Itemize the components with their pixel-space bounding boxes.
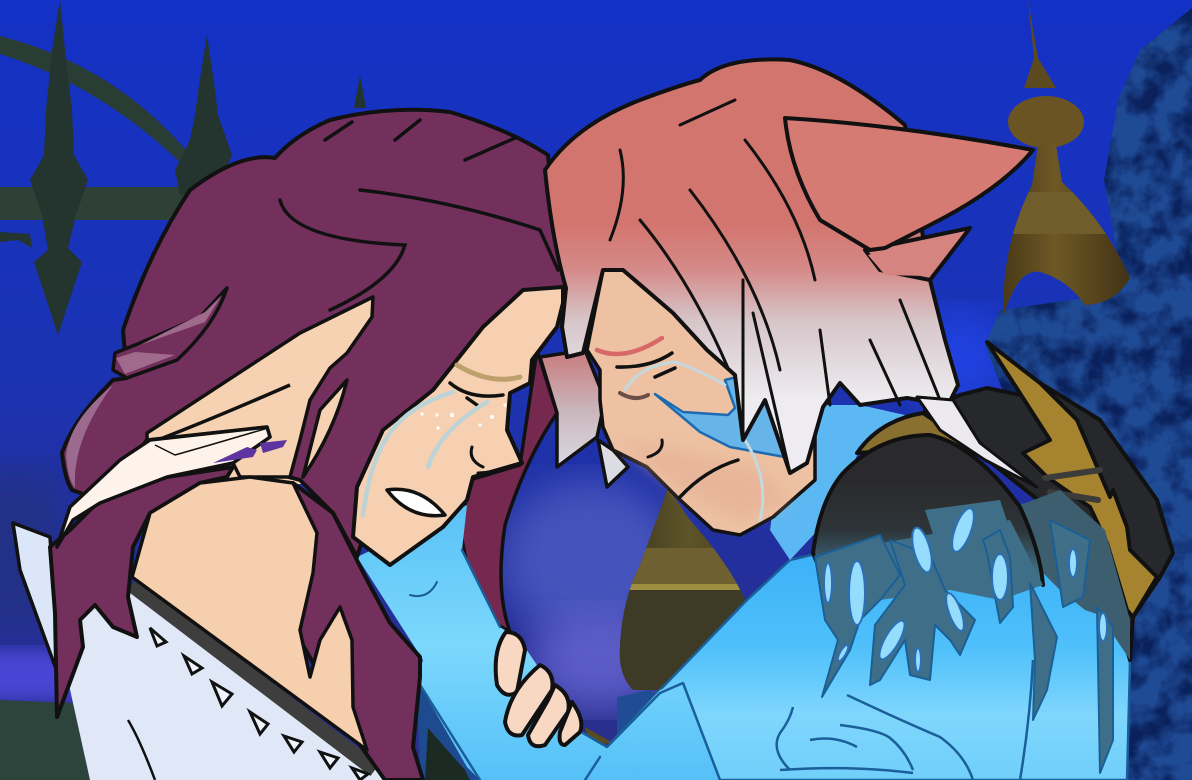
- figure: skin behind the feather: [205, 462, 303, 484]
- scenery: blue rock pillar: [985, 8, 1192, 780]
- figure: white braid: [917, 397, 1037, 487]
- tears: [363, 392, 487, 515]
- figure: fold lines on the torso: [777, 660, 1033, 780]
- closed eye: [450, 383, 503, 405]
- scenery: dark spires and rail left: [0, 0, 366, 335]
- scenery: rock and stone behind the arm: [417, 680, 660, 780]
- figure: woman's hair strand lines: [280, 120, 558, 310]
- figure: man's face: [587, 270, 815, 535]
- figure: man's coat shoulder: [813, 342, 1173, 660]
- figure: man's neck: [770, 405, 905, 560]
- brow: [457, 365, 520, 379]
- figure: elf ear skin: [147, 297, 373, 477]
- figure: woman's bare shoulder: [132, 477, 367, 750]
- figure: dress lace trim: [132, 585, 375, 780]
- clenched mouth: [387, 489, 445, 516]
- cat ear: [785, 118, 1033, 250]
- figure: hair ribbon lock: [113, 288, 227, 378]
- hair strand lines: [610, 100, 940, 473]
- gold ornament: [987, 342, 1157, 617]
- scenery: stone at lower left: [0, 700, 90, 780]
- nostril shadow: [620, 393, 648, 398]
- teal fade of the coat: [1020, 490, 1130, 660]
- figure: white feather ornament: [57, 427, 287, 547]
- figure: woman's lock over shoulder: [293, 483, 423, 780]
- figure: woman's lower left strands: [50, 467, 233, 717]
- figure: woman's back hair between the faces: [460, 350, 557, 632]
- figure: man's lower fringe behind the face: [540, 350, 628, 487]
- dome of the shoulder: [813, 435, 1043, 585]
- freckles: [420, 403, 507, 430]
- second ear tip: [865, 228, 970, 280]
- figure: woman's dress: [13, 523, 385, 780]
- figure: woman's face: [353, 287, 563, 565]
- scenery: bronze bell spire right: [1000, 0, 1135, 320]
- brow: [597, 338, 662, 354]
- figure: blue arm: [357, 505, 720, 780]
- figure: light holes in the tendrils: [824, 506, 1107, 672]
- figure: woman's main hair: [62, 110, 568, 557]
- cheek shadow: [615, 440, 790, 520]
- figure: man's main hair: [545, 59, 1033, 473]
- closed eye: [617, 353, 675, 377]
- figure: woman's lighter hair rim: [66, 385, 113, 488]
- scenery: bronze bell center: [620, 490, 745, 690]
- frown: [680, 460, 738, 497]
- figure: man's blue torso: [585, 500, 1130, 780]
- blue crystal cheek: [655, 372, 790, 458]
- nose: [648, 440, 662, 457]
- figure: clasping hand: [496, 632, 581, 746]
- tears: [625, 362, 763, 520]
- figure: dark tendrils on the blue torso: [815, 500, 1113, 773]
- wrist crease: [410, 582, 437, 596]
- nose: [471, 447, 520, 473]
